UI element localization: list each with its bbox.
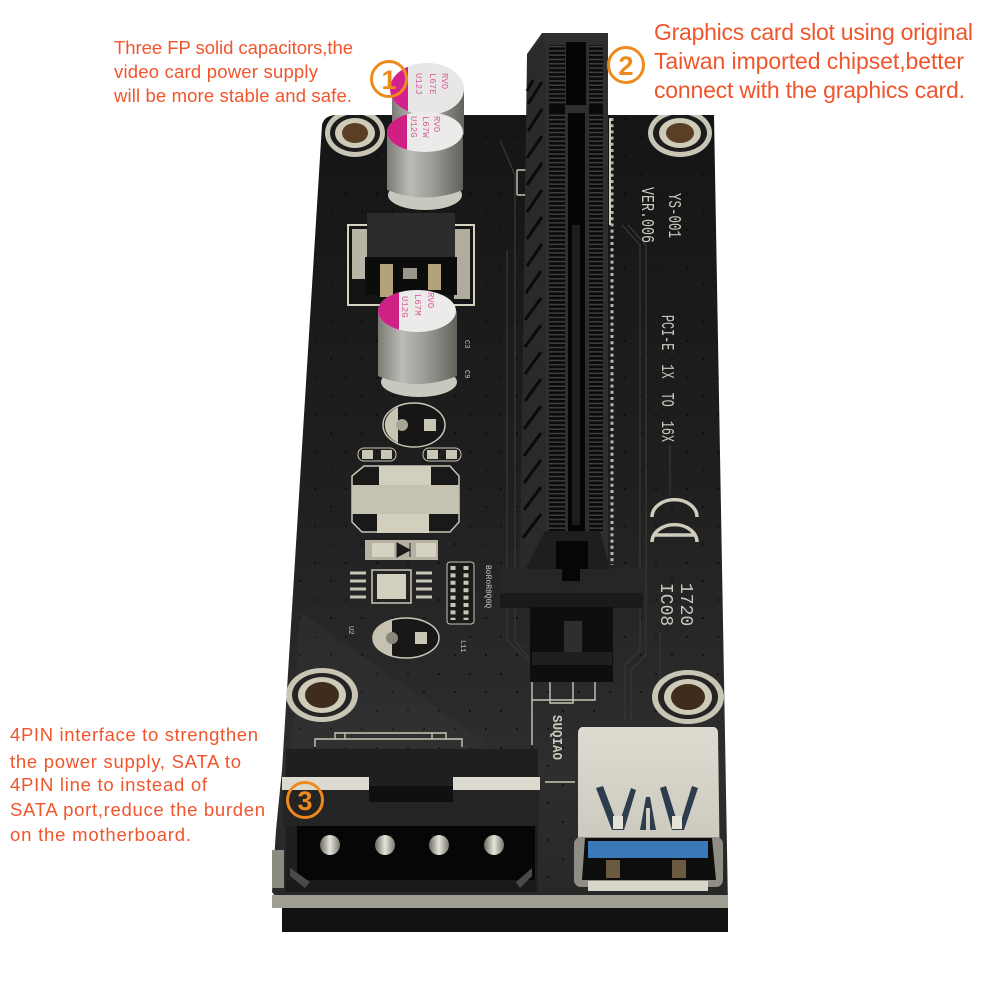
mounting holes [286,109,724,724]
callout 3: 4-pin text: on the motherboard. [10,824,191,845]
number badge 1 [372,62,406,96]
silkscreen text: SUQIAO [548,715,564,760]
capacitor 3: L67M [412,294,422,316]
number badge 3: 3 [297,786,313,816]
callout 2: slot text: connect with the graphics card. [654,77,965,103]
4-pin power connector [272,749,540,892]
capacitor 2: L67W [420,116,430,138]
number badge 3 [288,782,322,818]
callout 1: capacitors text: will be more stable and safe. [113,85,352,106]
callout 3: 4-pin text: 4PIN interface to strengthen [10,724,258,745]
callout 2: slot text [654,19,973,103]
riser board [272,33,728,932]
silkscreen text: YS-001 [663,193,683,238]
capacitor 3: U12G [399,296,409,318]
capacitor 3: RVO [425,292,435,308]
solder pads and power circuit [350,403,474,658]
callout 3: 4-pin text: 4PIN line to instead of [10,774,208,795]
callout 2: slot text: Graphics card slot using original [654,19,973,45]
callout 1: capacitors text: video card power supply [114,61,319,82]
capacitor 2: RVO [431,116,441,132]
silkscreen text [346,187,697,760]
silkscreen outlines near connectors [315,170,595,782]
capacitor 1: RVO [439,73,449,89]
silkscreen text: U2 [346,626,354,634]
silkscreen text: C9 [462,370,470,378]
PCI-E x16 slot [520,33,612,570]
capacitor 3 [378,290,457,397]
capacitor 1: U12J [413,73,423,95]
callout 2: slot text: Taiwan imported chipset,better [654,48,964,74]
number badge 1: 1 [381,65,397,95]
callout 3: 4-pin text [10,724,265,845]
silkscreen text: IC08 [655,583,675,626]
capacitor 2 [387,113,463,210]
board edge [272,895,728,932]
silkscreen text: 1720 [675,583,695,626]
silkscreen text: PCI-E 1X TO 16X [656,315,676,442]
capacitor 2: U12G [408,116,418,138]
callout 3: 4-pin text: SATA port,reduce the burden [10,799,265,820]
number badge 2 [608,48,644,82]
callout 1: capacitors text [113,37,353,106]
silkscreen text: L11 [458,640,466,653]
board: PCB [272,115,728,932]
silkscreen text: C3 [462,340,470,348]
capacitor 1: L67E [427,73,437,95]
voltage regulator [348,213,474,305]
traces [500,140,670,720]
capacitor 1 [390,63,464,135]
slot latch [500,531,644,682]
silkscreen text: VER.006 [636,187,656,243]
number badge 2: 2 [618,51,634,81]
callout 3: 4-pin text: the power supply, SATA to [10,751,241,772]
silkscreen text: BoRoR8Q0Q [483,565,492,608]
USB 3.0 port [574,727,723,891]
pins [320,835,504,855]
callout 1: capacitors text: Three FP solid capacitors,the [114,37,353,58]
